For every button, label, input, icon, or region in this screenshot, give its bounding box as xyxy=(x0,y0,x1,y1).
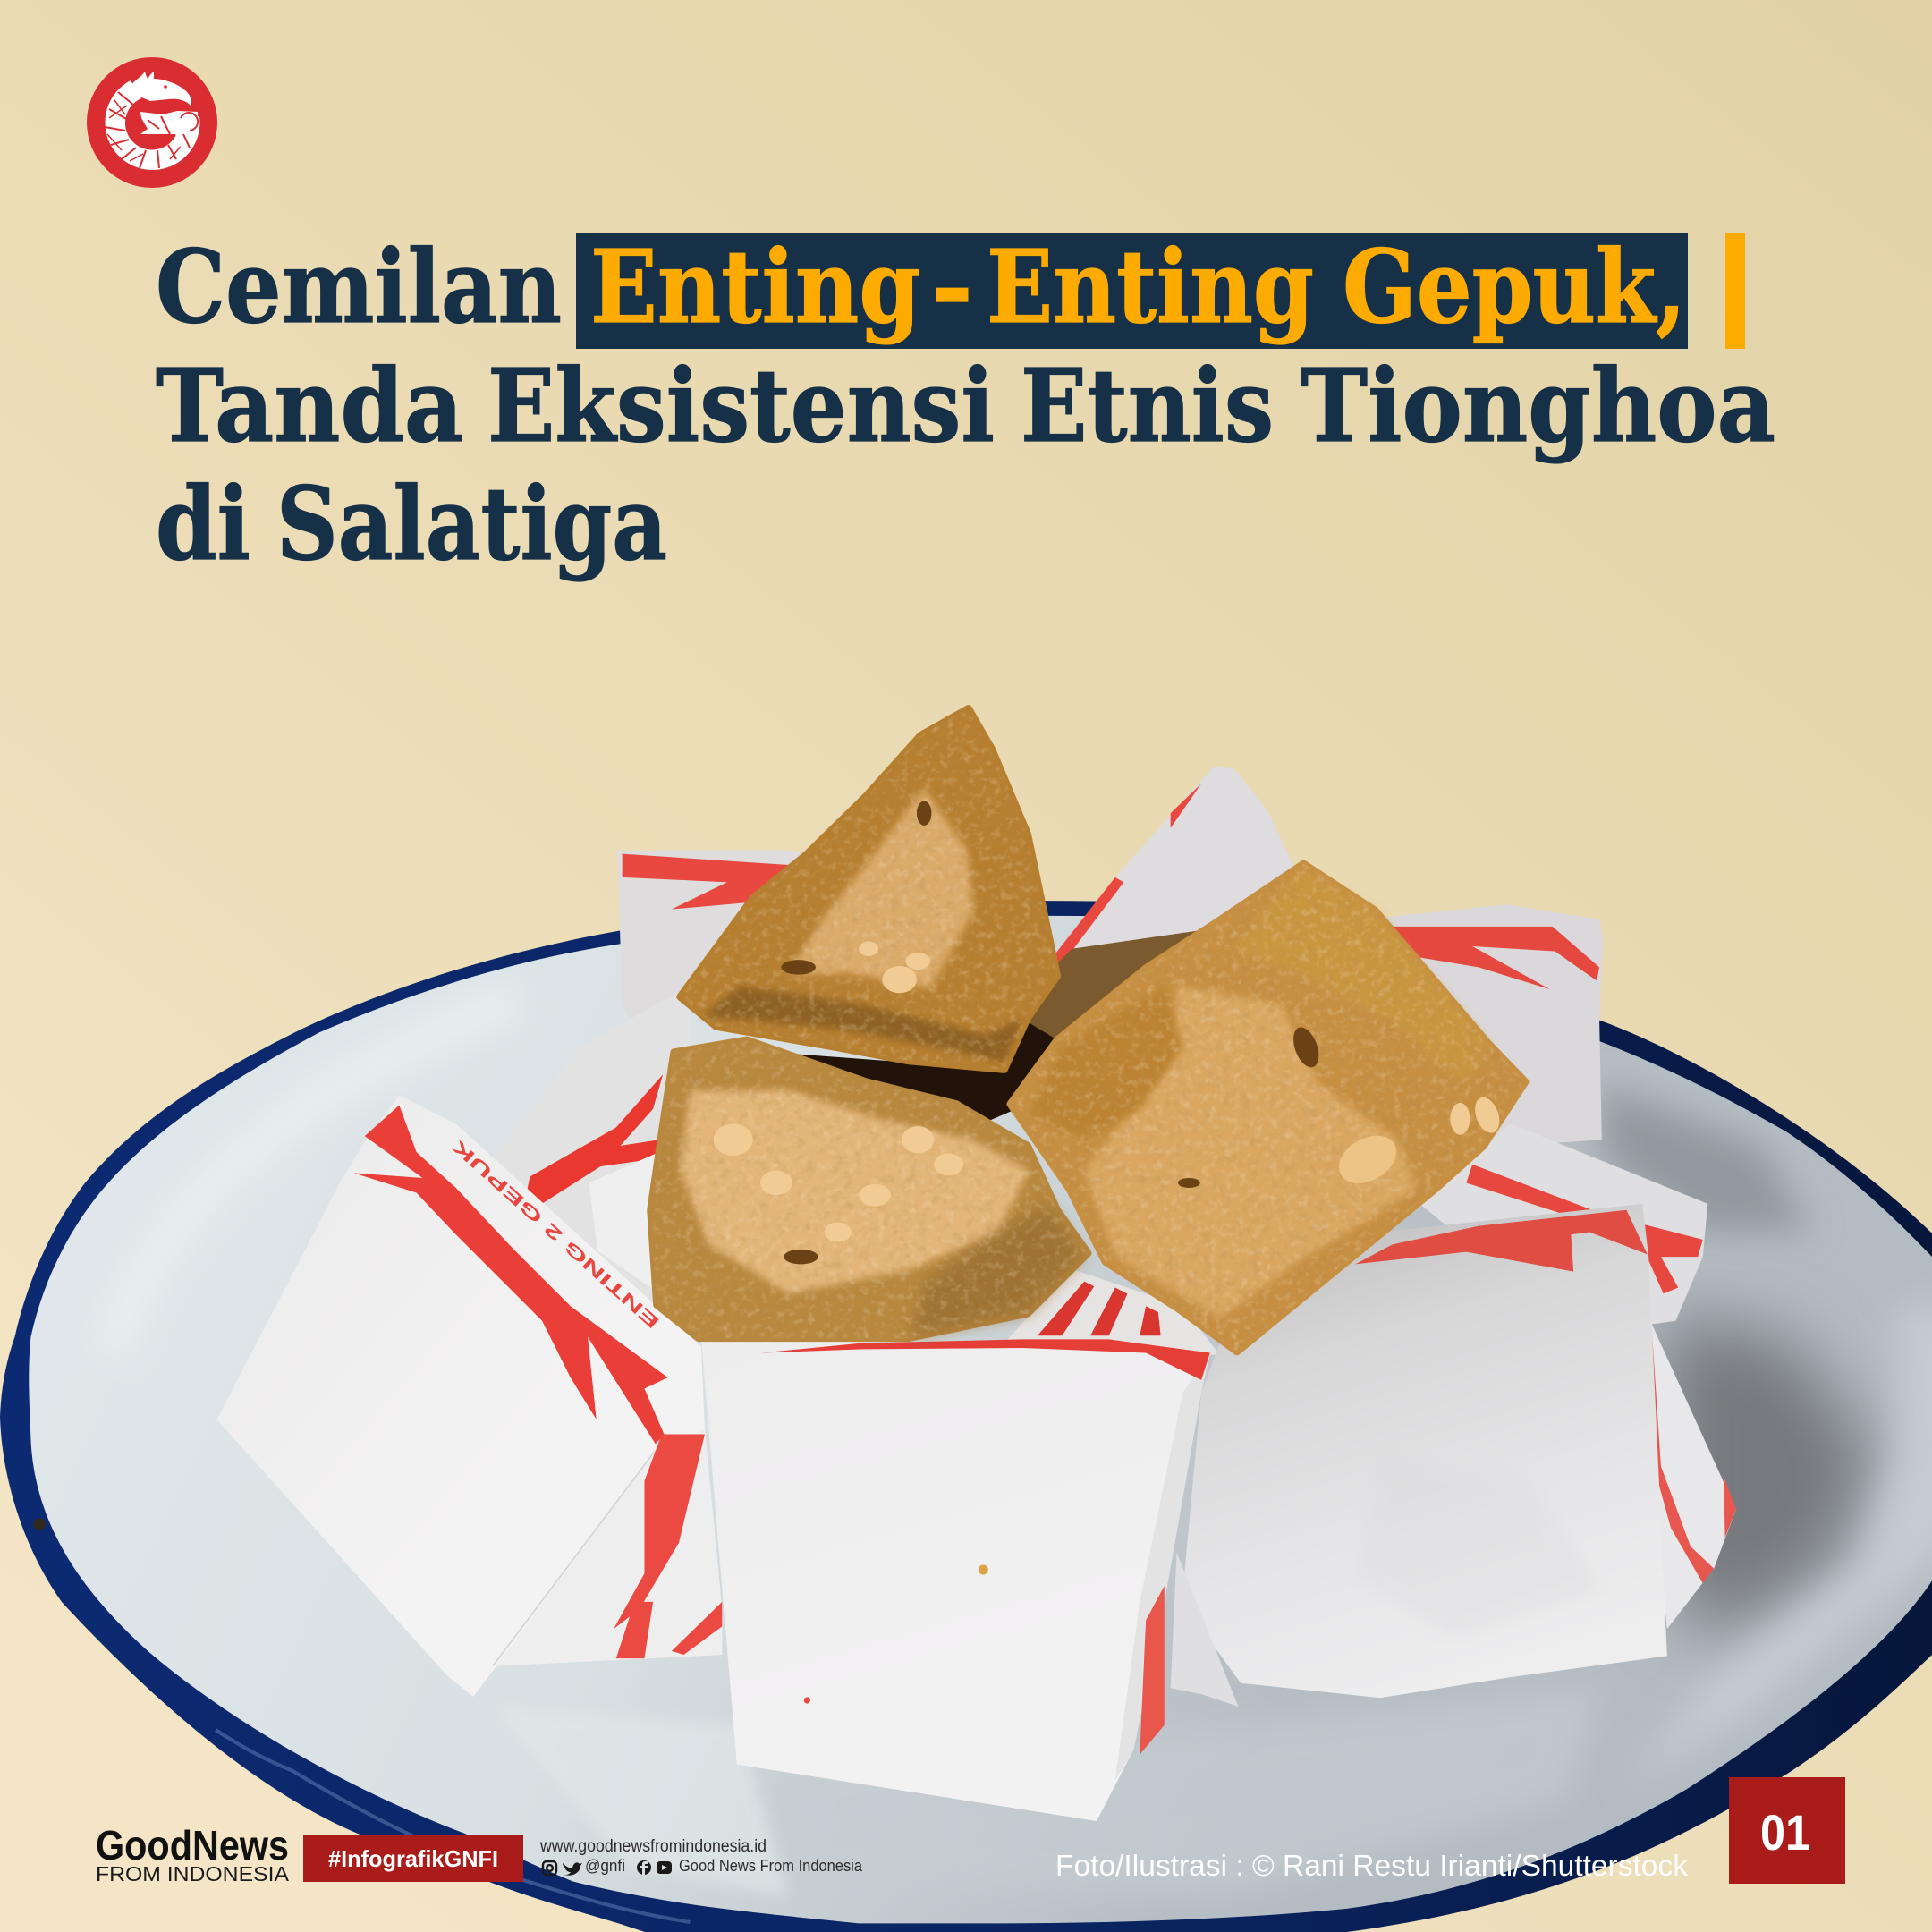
title line 1: Enting xyxy=(987,229,1314,346)
title line 1: - xyxy=(931,229,973,346)
cake: lower left xyxy=(650,1040,1088,1338)
title line 3 xyxy=(156,466,667,583)
photo credit: Foto/Ilustrasi : © Rani Restu Irianti/Shutterstock xyxy=(1055,1849,1689,1882)
handle: @gnfi xyxy=(585,1857,625,1875)
photo: plate with enting-enting gepuk xyxy=(0,702,1932,1932)
title line 1: Cemilan xyxy=(156,229,562,346)
rim chip xyxy=(33,1518,46,1530)
title accent bar xyxy=(1725,233,1745,349)
cake filling top xyxy=(789,789,973,988)
website: www.goodnewsfromindonesia.id xyxy=(539,1837,767,1856)
social links xyxy=(539,1837,863,1876)
page number: 01 xyxy=(1760,1804,1810,1860)
title line 1 xyxy=(156,229,1686,346)
peanuts and crumbs xyxy=(714,941,1504,1242)
red band xyxy=(353,1106,668,1444)
cake lower left shaded base xyxy=(911,1201,1084,1338)
plate shading xyxy=(111,998,1932,1897)
hashtag tag xyxy=(303,1835,523,1882)
title line 2: Tanda xyxy=(156,348,463,465)
packet: large left xyxy=(216,1096,722,1697)
title line 3: Salatiga xyxy=(276,466,667,583)
dark holes xyxy=(781,801,1324,1264)
logo: GNFI garuda emblem xyxy=(87,57,217,188)
footer brand: GoodNews from Indonesia xyxy=(96,1822,290,1885)
body xyxy=(1182,1204,1667,1698)
packet: left middle behind cake xyxy=(490,986,690,1331)
title line 2 xyxy=(156,348,1775,465)
cakes xyxy=(640,702,1534,1361)
rim highlight xyxy=(216,1730,690,1922)
icon: youtube xyxy=(657,1861,672,1874)
cake right lighter cut face xyxy=(1084,986,1417,1318)
footer brand: GoodNews from Indonesia: FROM INDONESIA xyxy=(96,1862,290,1885)
packet: back right xyxy=(1380,904,1603,1146)
dark gap and hidden cake xyxy=(789,930,1201,1127)
icon: twitter xyxy=(563,1862,582,1876)
packet: front right xyxy=(1171,1204,1736,1707)
flap xyxy=(1645,1318,1736,1629)
packet: middle right xyxy=(1417,1123,1707,1325)
title line 3: di xyxy=(156,466,250,583)
logo ornament ring xyxy=(105,80,199,170)
title line 2: Tionghoa xyxy=(1301,348,1775,465)
title line 2: Etnis xyxy=(1021,348,1274,465)
cake filling lower left xyxy=(680,1090,1029,1293)
plate face xyxy=(29,916,1932,1923)
packet: back top middle xyxy=(1045,767,1296,998)
logo inner wing xyxy=(140,111,198,154)
packet: hidden centre with red print xyxy=(1004,1269,1220,1355)
plate rim xyxy=(0,901,1932,1932)
title line 2: Eksistensi xyxy=(487,348,995,465)
footer brand: GoodNews from Indonesia: GoodNews xyxy=(96,1822,289,1868)
plate xyxy=(0,901,1932,1932)
title xyxy=(156,229,1775,583)
packet: back left xyxy=(617,851,816,1109)
wrapper lettering: ENTING 2 GEPUK xyxy=(449,1136,664,1332)
cake top shaded underside xyxy=(702,986,1022,1062)
title line 1: Gepuk, xyxy=(1343,229,1686,346)
title highlight box xyxy=(576,233,1688,349)
page name: Good News From Indonesia xyxy=(679,1857,863,1875)
title line 1: Enting xyxy=(590,229,920,346)
cake texture xyxy=(640,702,1534,1361)
logo disc xyxy=(87,57,217,188)
logo garuda head xyxy=(131,72,191,106)
hashtag tag: #InfografikGNFI xyxy=(328,1845,498,1872)
page number xyxy=(1729,1777,1845,1884)
icon: facebook xyxy=(637,1860,651,1875)
packet: front center xyxy=(701,1337,1210,1821)
icon: instagram xyxy=(543,1861,556,1875)
cake: right xyxy=(1011,864,1525,1352)
cake: top triangle xyxy=(680,708,1057,1070)
